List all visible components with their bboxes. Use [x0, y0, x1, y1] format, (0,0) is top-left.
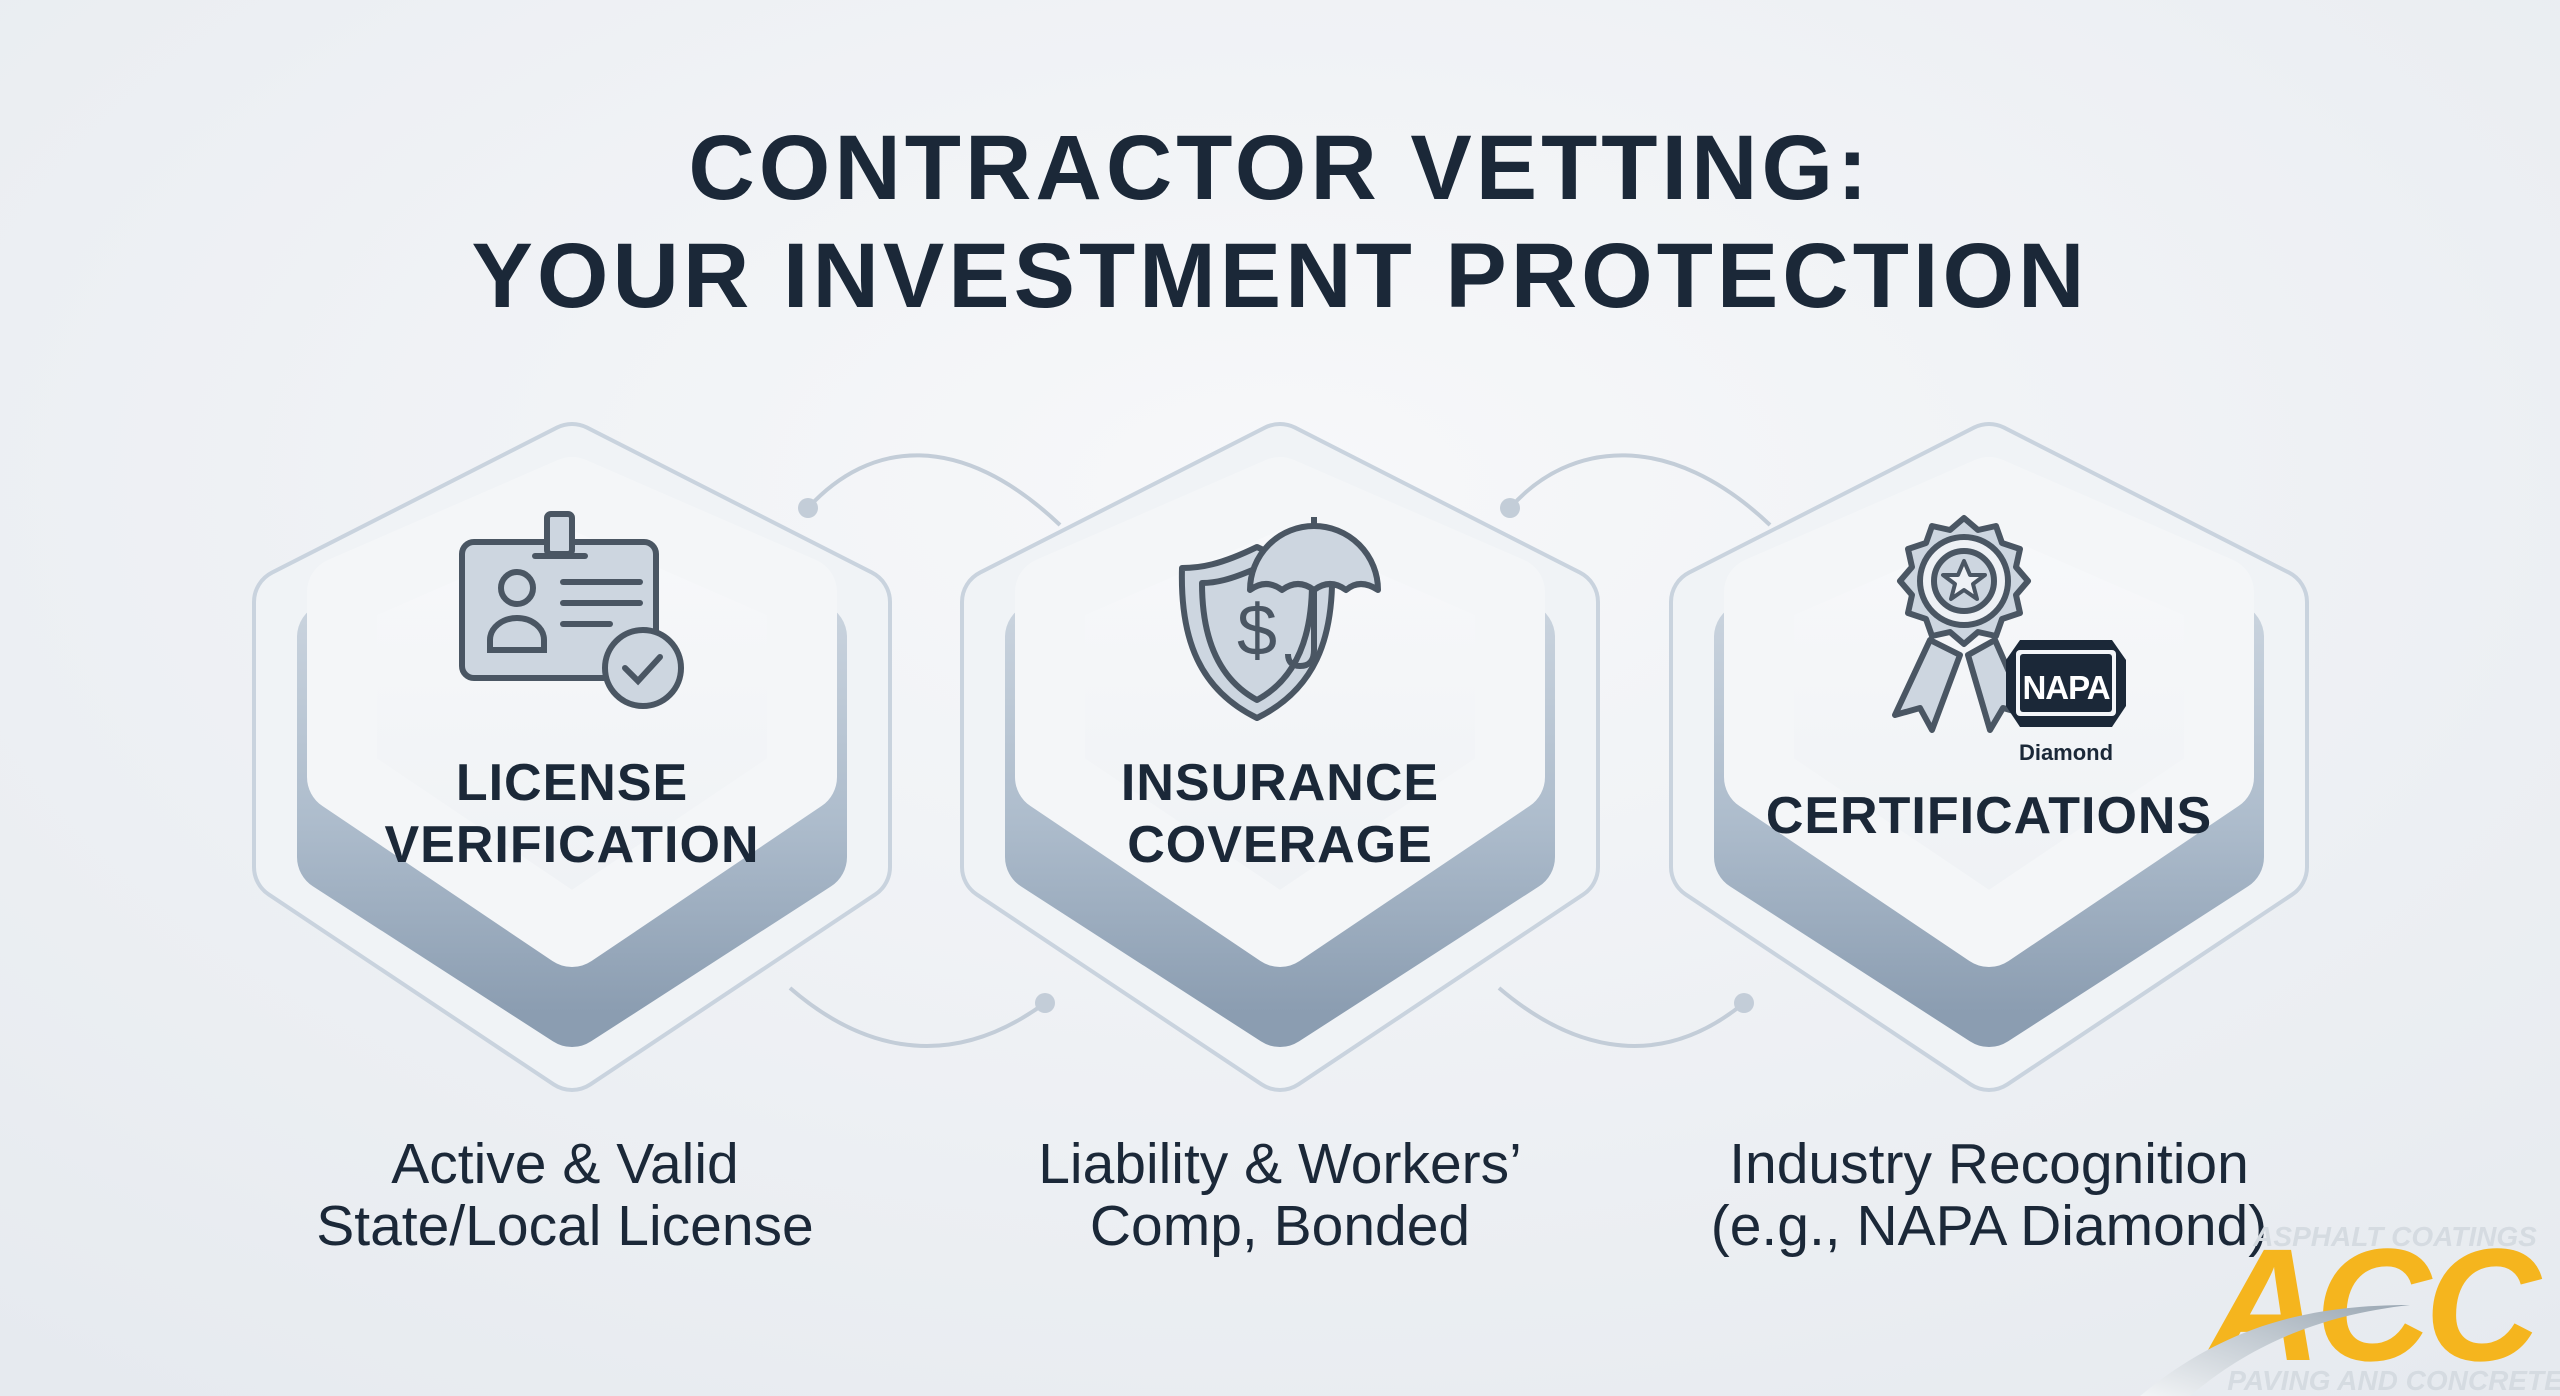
panel: insurance coverage [995, 457, 1565, 1057]
heading: insurance coverage: INSURANCE [1121, 754, 1439, 812]
heading: license verification: LICENSE [456, 754, 688, 812]
title: YOUR INVESTMENT PROTECTION [472, 225, 2088, 327]
title: CONTRACTOR VETTING: [688, 117, 1872, 219]
text block: descriptions: Industry Recognition [1729, 1132, 2249, 1196]
text block: descriptions: Liability & Workers’ [1038, 1132, 1522, 1196]
icon: shield with umbrella: $ [1237, 591, 1277, 671]
panel: certifications [1704, 457, 2274, 1057]
title [472, 117, 2088, 327]
icon: rosette with NAPA Diamond: Diamond [2019, 740, 2113, 765]
icon: rosette with NAPA Diamond: NAPA [2022, 669, 2110, 706]
connectors [790, 455, 1770, 1046]
text block: descriptions: Comp, Bonded [1090, 1194, 1470, 1258]
icon: rosette with NAPA Diamond [1895, 518, 2126, 765]
text block: descriptions: Active & Valid [391, 1132, 739, 1196]
text block: descriptions [316, 1132, 2267, 1258]
heading: insurance coverage: COVERAGE [1127, 816, 1433, 874]
heading: license verification [384, 754, 760, 874]
logo: ACC: PAVING AND CONCRETE [2227, 1365, 2560, 1396]
text block: descriptions: (e.g., NAPA Diamond) [1711, 1194, 2267, 1258]
icon: shield with umbrella [1182, 517, 1378, 718]
icon: id card with check [462, 514, 681, 706]
logo: ACC: ASPHALT COATINGS [2252, 1221, 2537, 1252]
heading: insurance coverage [1121, 754, 1439, 874]
panel: license verification [287, 457, 857, 1057]
logo: ACC: ACC [2202, 1215, 2543, 1394]
text block: descriptions: State/Local License [316, 1194, 814, 1258]
heading: license verification: VERIFICATION [384, 816, 760, 874]
heading: certifications: CERTIFICATIONS [1766, 787, 2212, 845]
